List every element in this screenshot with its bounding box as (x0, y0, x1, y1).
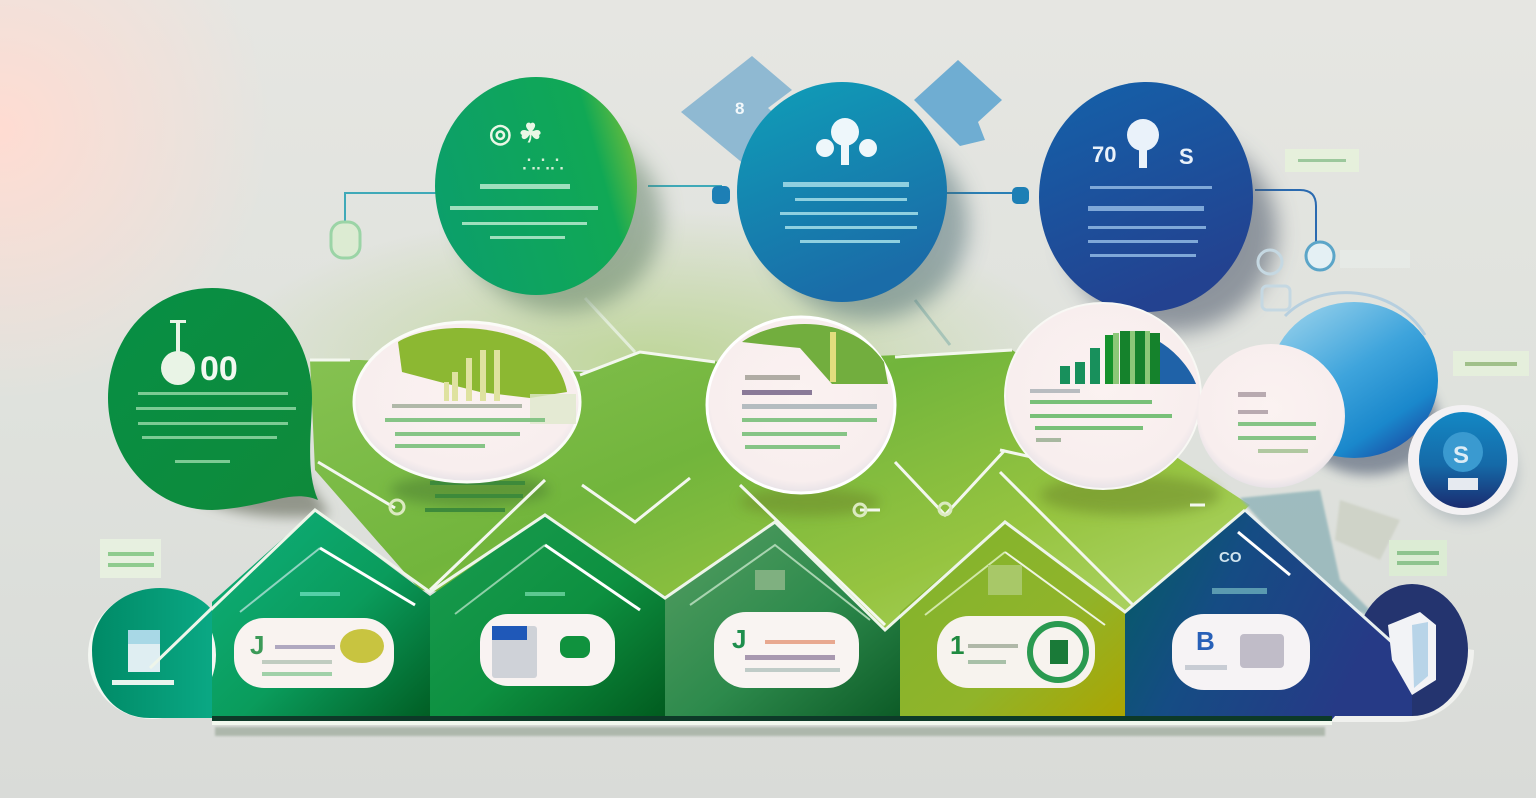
text lines (450, 184, 598, 239)
end cap left (88, 588, 216, 719)
bottom base line (212, 716, 1332, 736)
circle: teal top (737, 82, 968, 320)
ring icon (1030, 624, 1086, 680)
circle: green top (435, 77, 662, 312)
circle: navy top: S (1179, 144, 1194, 169)
panel: white bubble 1 (354, 322, 580, 482)
house bubble 1 (234, 618, 394, 688)
tag left (100, 539, 161, 578)
icon (161, 320, 195, 385)
white roof outline (150, 510, 1245, 668)
panel: white bubble 2 (707, 317, 895, 493)
heading number: 00 (200, 350, 238, 388)
chevron lines (310, 350, 1205, 625)
panel: white bubble 4 (1197, 344, 1345, 488)
circle: green top: ∴∴∴ (522, 152, 564, 177)
shape: light blue puzzle tag left: 8 (735, 99, 744, 118)
icons right of navy circle (1258, 242, 1410, 310)
house bubble 4 (937, 616, 1095, 688)
house 3 (665, 522, 900, 722)
teal patch lower right (1240, 490, 1400, 620)
label tag right (1453, 351, 1529, 376)
tree icon (816, 118, 877, 165)
text lines (385, 404, 545, 448)
green header (742, 324, 888, 384)
text lines (1030, 389, 1172, 442)
building icon (112, 630, 174, 685)
circle: navy top (1039, 82, 1277, 332)
box icon on right cap (1388, 612, 1436, 695)
house bubble 5: B (1196, 626, 1215, 656)
end cap right (1320, 584, 1474, 722)
blue corner (1160, 342, 1196, 384)
badge: small navy circle: S (1453, 442, 1469, 469)
text lines (742, 375, 877, 449)
glass tab (530, 394, 576, 424)
badge: small navy circle (1408, 405, 1518, 522)
house 5 (1125, 510, 1395, 722)
text lines (1088, 186, 1212, 257)
bar chart (444, 350, 500, 401)
tree icon and label: 70 (1092, 142, 1116, 167)
label tag top right (1285, 149, 1359, 172)
house bubble 3: J (732, 624, 746, 654)
house bubble 5 (1172, 614, 1310, 690)
bar chart (830, 332, 836, 382)
house bubble 4: 1 (950, 630, 964, 660)
green header (398, 328, 567, 398)
icon and lines: J (250, 630, 264, 660)
blue ball (1270, 293, 1438, 475)
dark text lines under bubble 1 (425, 481, 525, 512)
panel: white bubble 3 (1005, 303, 1201, 489)
icon: small green outline badge (331, 222, 360, 258)
house bubble 2 (480, 614, 615, 686)
top green icons: ◎ ☘ (489, 118, 542, 148)
bar chart (1060, 331, 1160, 384)
text lines (780, 182, 918, 243)
green icon (560, 636, 590, 658)
house row (150, 510, 1395, 722)
text lines (1238, 392, 1316, 453)
house 4 (900, 522, 1125, 722)
olive shadows below bubbles (390, 474, 1220, 516)
icon and lines (250, 629, 384, 676)
small markers on chevrons (390, 500, 951, 516)
green middle band (310, 350, 1250, 630)
house 2 (430, 515, 665, 722)
tag right (1389, 540, 1447, 576)
house 5: CO (1219, 549, 1242, 566)
house 1 (212, 510, 430, 722)
text lines (136, 392, 296, 463)
circle: left green speech (108, 288, 330, 517)
shape: light blue puzzle tag left (681, 56, 792, 165)
house bubble 3 (714, 612, 859, 688)
connector nodes (712, 186, 1029, 204)
document icon (492, 626, 537, 678)
shape: light blue puzzle tag right (914, 60, 1002, 146)
connector lines (345, 186, 1316, 352)
